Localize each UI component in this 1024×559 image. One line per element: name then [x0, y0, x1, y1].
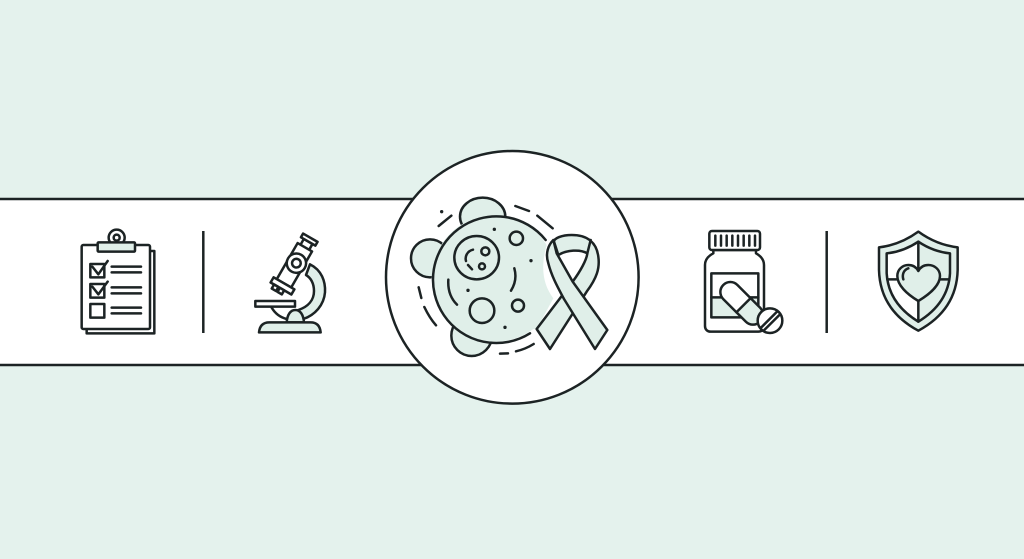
- icon: microscope: [255, 232, 325, 332]
- divider left: [202, 231, 205, 333]
- dashed motion arcs: [419, 206, 553, 354]
- cell lobes: [411, 198, 505, 356]
- icon: pill bottle: [705, 231, 782, 333]
- white band: [0, 199, 1024, 365]
- ribbon: [537, 235, 607, 349]
- icon: cancer cell with ribbon: [411, 198, 607, 356]
- divider right: [825, 231, 828, 333]
- cell nucleus: [454, 236, 499, 279]
- icon: clipboard checklist: [82, 230, 154, 333]
- cell body: [432, 215, 553, 343]
- organelles: [440, 210, 533, 329]
- icon: heart shield: [879, 232, 958, 331]
- circle: central medallion: [386, 151, 639, 404]
